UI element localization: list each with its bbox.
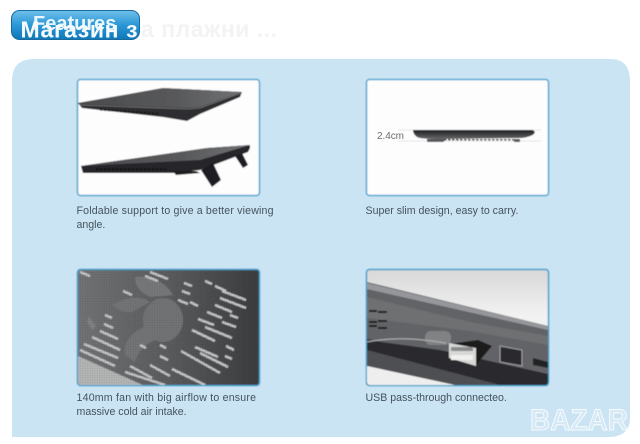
caption: foldable support: Foldable support to give a better viewing bbox=[76, 205, 274, 217]
watermark logo: BAZAR bbox=[530, 404, 628, 437]
photo frame: side profile with height bbox=[366, 80, 548, 196]
panel: USB pass-through bbox=[366, 270, 548, 404]
photo frame: USB connector bbox=[366, 270, 548, 386]
panel: foldable support bbox=[76, 80, 274, 231]
panel: slim design bbox=[366, 80, 548, 217]
caption: fan: 140mm fan with big airflow to ensure bbox=[76, 392, 256, 404]
photo frame: fan mesh bbox=[78, 270, 260, 386]
panel: fan: massive cold air intake. bbox=[76, 406, 187, 418]
caption: slim design: Super slim design, easy to carry. bbox=[366, 205, 518, 217]
features heading badge: Features bbox=[33, 13, 116, 35]
caption: USB: USB pass-through connecteo. bbox=[366, 392, 507, 404]
height label: 2.4cm bbox=[377, 131, 404, 142]
panel: foldable support: angle. bbox=[76, 219, 105, 231]
photo frame: laptop cooler side views bbox=[78, 80, 260, 196]
faded page title: а плажни ... bbox=[141, 16, 277, 42]
panel: fan bbox=[76, 270, 260, 418]
features heading badge: Магазин з bbox=[20, 16, 138, 42]
